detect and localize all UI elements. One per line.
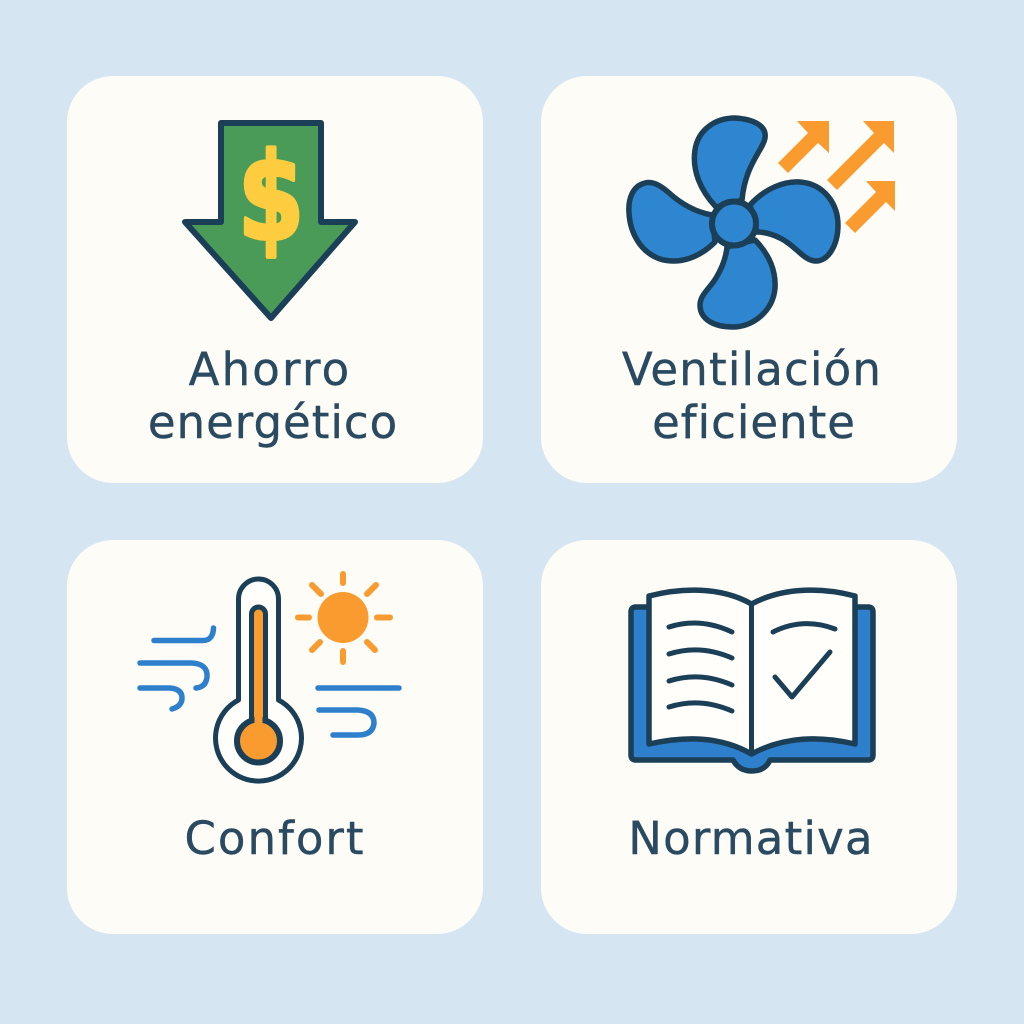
icon: wind left [140,628,214,709]
icon: blue fan [629,118,838,327]
heading: Ahorro energético: energético [148,396,398,449]
panel: Confort [67,540,483,934]
icon: open book [631,590,873,771]
heading: Ahorro energético: Ahorro [189,343,351,396]
heading: Ventilación eficiente: eficiente [652,396,856,449]
panel: Normativa [541,540,957,934]
icon: orange arrows [778,121,895,233]
heading: Normativa: Normativa [628,812,874,865]
heading: Ventilación eficiente: Ventilación [622,343,882,396]
icon: thermometer [216,579,302,781]
icon: green down arrow with dollar: $ [238,128,304,268]
icon: wind right [318,688,399,735]
icon: green down arrow with dollar [185,123,355,318]
heading: Ahorro energético [148,343,398,449]
heading: Ventilación eficiente [622,343,882,449]
icon: sun [298,574,390,662]
panel: Ventilación eficiente [541,76,957,483]
heading: Confort: Confort [184,812,366,865]
panel: Ahorro energético [67,76,483,483]
